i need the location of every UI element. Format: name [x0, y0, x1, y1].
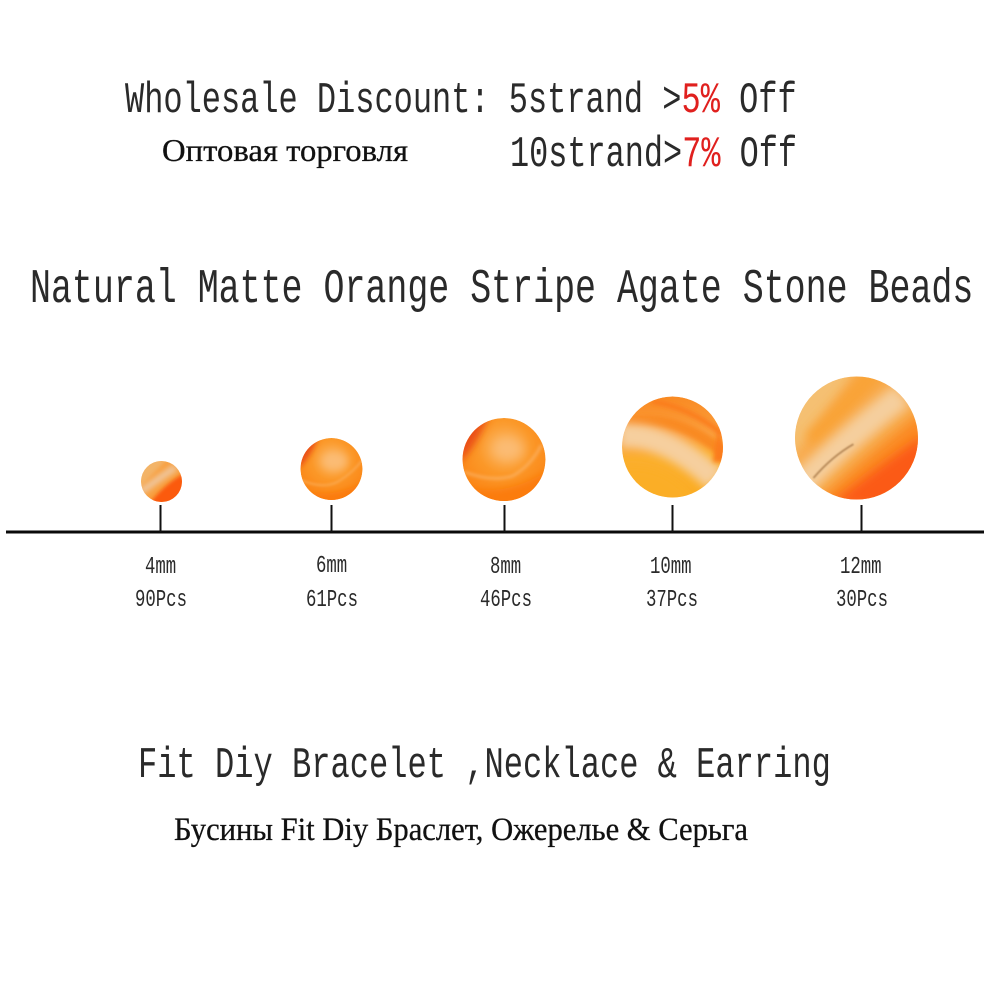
heading: wholesale discount: [125, 75, 797, 180]
bead: 8mm: [462, 418, 546, 501]
label: 4mm: 90Pcs: [135, 588, 187, 614]
text: russian fit diy: Бусины Fit Diy Браслет, Ожерелье & Серьга: [174, 812, 748, 848]
text: wholesale discount 5 strand: Wholesale Discount: 5strand >5% Off: [125, 75, 797, 126]
label: 12mm: [836, 555, 888, 614]
bead: 12mm: [795, 376, 918, 500]
label: 8mm: [480, 555, 532, 614]
bead: 10mm: [622, 396, 723, 498]
title: Natural Matte Orange Stripe Agate Stone Beads: [30, 262, 973, 317]
size chart: [6, 370, 984, 614]
text: russian wholesale: Оптовая торговля: [162, 132, 408, 168]
label: 6mm: 6mm: [316, 554, 347, 580]
label: 10mm: 37Pcs: [646, 588, 698, 614]
label: 12mm: 30Pcs: [836, 588, 888, 614]
label: 4mm: [135, 555, 187, 614]
label: 12mm: 12mm: [840, 555, 882, 581]
label: 10mm: 10mm: [650, 555, 692, 581]
tick: 4mm: [160, 505, 162, 532]
tick: 10mm: [672, 505, 674, 532]
label: 6mm: 61Pcs: [306, 588, 358, 614]
bead: 6mm: [300, 438, 362, 500]
axis line: [6, 530, 984, 534]
subtitle: fit diy: Fit Diy Bracelet ,Necklace & Earring: [138, 740, 831, 791]
label: 10mm: [646, 555, 698, 614]
bead: 4mm: [141, 461, 182, 502]
tick: 8mm: [504, 505, 506, 532]
label: 8mm: 8mm: [490, 555, 521, 581]
label: 6mm: [306, 554, 358, 614]
tick: 12mm: [860, 505, 862, 532]
text: 10 strand discount: 10strand>7% Off: [510, 129, 797, 180]
label: 8mm: 46Pcs: [480, 588, 532, 614]
label: 4mm: 4mm: [145, 555, 176, 581]
tick: 6mm: [330, 505, 332, 532]
